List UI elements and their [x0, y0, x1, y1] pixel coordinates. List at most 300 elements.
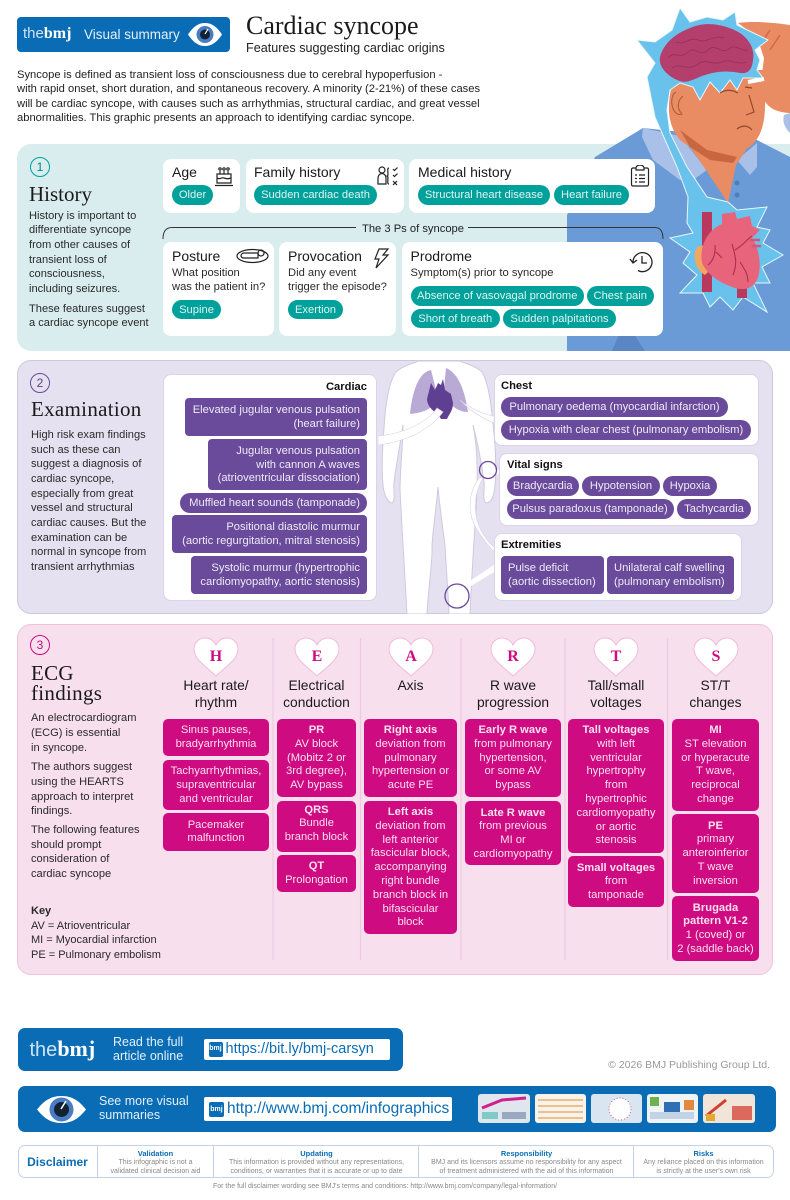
finding: late R wave [465, 801, 561, 865]
prodrome title: Prodrome [410, 248, 472, 264]
finding: tall voltages: or aortic [596, 821, 636, 833]
finding: tall voltages: from [605, 779, 627, 791]
finding: pacemaker malfunction: malfunction [187, 832, 245, 844]
finding: pulse deficit: Pulse deficit [508, 562, 568, 574]
heart letter S: S [711, 648, 720, 665]
finding: late R wave: from previous [479, 820, 547, 832]
finding: PE: T wave [698, 861, 733, 873]
tag: sudden cardiac death [254, 185, 377, 204]
prompt note: consideration of [31, 853, 109, 865]
posture question: was the patient in? [172, 281, 265, 293]
validation text [98, 1159, 214, 1177]
tag: supine [172, 300, 221, 319]
tag: short of breath: Short of breath [418, 312, 492, 324]
column title [283, 678, 350, 710]
column title: voltages [590, 695, 642, 710]
finding: tachyarrhythmias: supraventricular [176, 779, 256, 791]
finding: cannon A waves: (atrioventricular dissociation) [218, 472, 360, 484]
extremities heading: Extremities [501, 538, 561, 550]
icon: eye [188, 23, 222, 46]
finding: left axis: block [397, 916, 424, 928]
finding: MI: ST elevation [684, 738, 746, 750]
finding: tall voltages: Tall voltages [583, 724, 649, 736]
finding: early R wave: hypertension, [479, 752, 547, 764]
finding: tall voltages: ventricular [590, 752, 642, 764]
provocation question [288, 267, 387, 293]
banner label: Visual summary [84, 27, 180, 42]
authors note: The authors suggest [31, 761, 132, 773]
finding: Brugada pattern: 2 (saddle back) [677, 943, 754, 955]
finding: PE: inversion [693, 875, 738, 887]
disclaimer panel [18, 1145, 774, 1178]
tag: chest pain: Chest pain [594, 290, 647, 302]
card: posture [163, 242, 274, 336]
tag: sudden palpitations: Sudden palpitations [510, 312, 609, 324]
finding: sinus pauses [163, 718, 269, 756]
finding: early R wave [465, 718, 561, 797]
footer terms line: For the full disclaimer wording see BMJ's terms and conditions: http://www.bmj.com/company/legal-information/ [213, 1183, 557, 1190]
intro text: with rapid onset, short duration, and spontaneous recovery. A minority (2-21%) of these cases [17, 83, 480, 95]
key [31, 905, 161, 960]
finding: pulmonary oedema [501, 397, 728, 416]
tag: short of breath [410, 308, 500, 328]
header banner [17, 17, 230, 52]
link box [204, 1097, 452, 1121]
heart letter R [490, 638, 536, 676]
responsibility text [420, 1159, 634, 1177]
family history title: Family history [254, 164, 340, 180]
finding: PR: (Mobitz 2 or [287, 752, 346, 764]
examination description: suggest a diagnosis of [31, 458, 141, 470]
finding: tall voltages: hypertrophic [585, 793, 647, 805]
finding: tall voltages [568, 718, 664, 853]
finding: hypoxia with clear chest [501, 420, 751, 440]
key: AV = Atrioventricular [31, 920, 130, 932]
finding: pulmonary oedema: Pulmonary oedema (myocardial infarction) [509, 401, 720, 413]
finding: tachyarrhythmias: Tachyarrhythmias, [171, 765, 261, 777]
finding: elevated JVP: (heart failure) [293, 418, 360, 430]
ECG description [31, 712, 136, 754]
finding: unilateral calf swelling: Unilateral calf swelling [614, 562, 725, 574]
column title: Axis [397, 678, 424, 693]
finding: QRS: Bundle [299, 817, 334, 829]
heart letter S [694, 638, 738, 676]
finding: small voltages [568, 856, 664, 907]
finding: late R wave: cardiomyopathy [474, 848, 552, 860]
tag: sudden palpitations [503, 308, 616, 328]
tag: heart failure [554, 185, 629, 204]
heading: history: History [29, 182, 92, 206]
prompt note: The following features [31, 824, 140, 836]
key: MI = Myocardial infarction [31, 934, 157, 946]
heading: ECG findings: ECG [31, 661, 74, 685]
finding: MI: T wave, [696, 765, 735, 777]
column S: ST/T changes [672, 638, 759, 961]
icon: bmj: bmj [210, 1106, 223, 1112]
finding: elevated JVP [185, 398, 367, 436]
finding: right axis [364, 718, 457, 797]
subtitle: Features suggesting cardiac origins [246, 41, 445, 55]
tag: older [172, 185, 213, 204]
finding: sinus pauses: Sinus pauses, [181, 724, 251, 736]
finding: diastolic murmur [172, 515, 367, 553]
finding: left axis: left anterior [383, 834, 438, 846]
finding: tall voltages: cardiomyopathy [576, 807, 655, 819]
finding: MI: change [697, 793, 734, 805]
finding: right axis: pulmonary [384, 752, 437, 764]
column A: axis [364, 638, 457, 934]
finding: cannon A waves [208, 439, 367, 490]
article URL: https://bit.ly/bmj-carsyn [226, 1040, 374, 1056]
column title [183, 678, 249, 710]
finding: left axis: fascicular block, [371, 847, 450, 859]
tag: structural heart disease [418, 185, 550, 204]
examination description: vessel and structural [31, 502, 133, 514]
card: provocation [279, 242, 396, 336]
finding: MI: reciprocal [691, 779, 740, 791]
panel: history [17, 144, 790, 351]
finding: left axis: bifascicular [383, 903, 438, 915]
card: cardiac findings [163, 374, 377, 600]
updating heading: Updating [300, 1149, 333, 1158]
validation text: validated clinical decision aid [111, 1168, 200, 1175]
heading: ECG findings [31, 661, 102, 704]
finding: PR: PR [309, 724, 324, 736]
finding: left axis: deviation from [375, 820, 446, 832]
heading: examination: Examination [31, 397, 142, 421]
responsibility text: BMJ and its licensors assume no responsibility for any aspect [431, 1159, 622, 1166]
section number 3 [30, 635, 50, 655]
examination description: normal in syncope from [31, 546, 146, 558]
chest heading: Chest [501, 380, 532, 392]
card: chest findings [494, 374, 758, 446]
banner: more visual summaries [18, 1086, 776, 1132]
prompt note: cardiac syncope [31, 868, 111, 880]
finding: pulsus paradoxus [506, 499, 674, 518]
heart letter E [294, 638, 340, 676]
finding: pacemaker malfunction [163, 813, 269, 851]
authors note: approach to interpret [31, 791, 133, 803]
infographics URL: http://www.bmj.com/infographics [227, 1100, 449, 1117]
history note: a cardiac syncope event [29, 317, 149, 329]
finding: hypotension: Hypotension [590, 480, 652, 492]
icon: bmj [208, 1042, 222, 1056]
finding: PE: anteroinferior [683, 847, 748, 859]
history note [29, 302, 149, 329]
heart letter H [194, 638, 238, 676]
finding: elevated JVP: Elevated jugular venous pulsation [193, 404, 360, 416]
finding: early R wave: bypass [495, 779, 531, 791]
history description: including seizures. [29, 283, 120, 295]
prodrome description: Symptom(s) prior to syncope [410, 267, 554, 279]
intro text: abnormalities. This graphic presents an approach to identifying cardiac syncope. [17, 112, 415, 124]
finding: right axis: deviation from [375, 738, 446, 750]
thumbnails of other infographics [478, 1094, 756, 1124]
disclaimer: responsibility [420, 1148, 634, 1176]
authors note: findings. [31, 805, 72, 817]
finding: hypoxia with clear chest: Hypoxia with clear chest (pulmonary embolism) [509, 424, 743, 436]
illustration: man with brain and heart [567, 7, 790, 351]
column H: heart rate and rhythm [163, 638, 269, 851]
finding: QT [277, 854, 356, 892]
posture question: What position [172, 267, 240, 279]
finding: MI: or hyperacute [681, 752, 750, 764]
heart letter T [594, 638, 638, 676]
history description: differentiate syncope [29, 224, 131, 236]
provocation question: Did any event [288, 267, 356, 279]
finding: systolic murmur [191, 556, 367, 594]
banner: read the full article [18, 1028, 403, 1071]
validation text: This infographic is not a [119, 1159, 192, 1166]
column title: conduction [283, 695, 350, 710]
icon: patient lying on bed [236, 248, 269, 264]
finding: systolic murmur: Systolic murmur (hypertrophic [211, 562, 360, 574]
finding: hypotension [582, 476, 660, 496]
card: family history [246, 158, 404, 213]
finding: diastolic murmur: Positional diastolic murmur [226, 521, 360, 533]
finding: systolic murmur: cardiomyopathy, aortic stenosis) [200, 576, 360, 588]
diagram: body with callouts [378, 361, 499, 614]
ECG description: in syncope. [31, 742, 87, 754]
authors note: using the HEARTS [31, 776, 124, 788]
finding: late R wave: Late R wave [481, 806, 545, 818]
finding: tall voltages: stenosis [595, 834, 637, 846]
finding: pulse deficit: (aortic dissection) [508, 576, 596, 588]
bracket: the 3 Ps of syncope [162, 223, 664, 239]
posture title: Posture [172, 248, 220, 264]
icon: cake [215, 167, 233, 186]
icon: bmj [209, 1102, 224, 1116]
intro text: Syncope is defined as transient loss of consciousness due to cerebral hypoperfusion - [17, 68, 442, 80]
disclaimer: updating [214, 1148, 418, 1176]
finding: unilateral calf swelling: (pulmonary embolism) [614, 576, 725, 588]
finding: sinus pauses: bradyarrhythmia [176, 738, 256, 750]
finding: early R wave: Early R wave [478, 724, 548, 736]
prompt note [31, 824, 140, 880]
responsibility text: of treatment administered with the aid of this information [440, 1168, 613, 1175]
card: vital signs [499, 453, 758, 526]
finding: tachyarrhythmias: and ventricular [179, 793, 253, 805]
age title: Age [172, 164, 197, 180]
link box [204, 1038, 390, 1060]
examination description: High risk exam findings [31, 429, 146, 441]
risks text: Any reliance placed on this information [643, 1159, 764, 1166]
finding: small voltages: tamponade [588, 889, 644, 901]
disclaimer: risks [634, 1148, 772, 1176]
history description: consciousness, [29, 268, 105, 280]
ECG description: An electrocardiogram [31, 712, 136, 724]
intro text [17, 68, 480, 124]
finding: PE: primary [697, 833, 734, 845]
risks text [634, 1159, 772, 1177]
history description [29, 210, 136, 295]
history description: History is important to [29, 210, 136, 222]
finding: left axis: right bundle [381, 875, 440, 887]
column title: rhythm [195, 695, 237, 710]
finding: diastolic murmur: (aortic regurgitation, mitral stenosis) [182, 535, 360, 547]
column title: Tall/small [588, 678, 644, 693]
risks heading: Risks [693, 1149, 714, 1158]
finding: left axis: Left axis [388, 806, 433, 818]
icon: clipboard [630, 165, 650, 187]
read article text: Read the full [113, 1035, 183, 1049]
tag: exertion: Exertion [295, 304, 336, 316]
finding: PR: AV bypass [290, 779, 343, 791]
finding: tachycardia [677, 499, 751, 518]
column title [689, 678, 742, 710]
section number 1: 1 [37, 160, 43, 174]
column title: Electrical [288, 678, 344, 693]
icon: eye [36, 1094, 86, 1124]
tag: chest pain [587, 286, 654, 306]
examination description: transient arrhythmias [31, 561, 135, 573]
cardiac heading: Cardiac [326, 381, 367, 393]
icon: bmj: bmj [209, 1045, 222, 1052]
examination description: such as these can [31, 444, 120, 456]
logo: the bmj: thebmj [23, 25, 71, 42]
section number 2: 2 [37, 376, 43, 390]
finding: left axis: accompanying [374, 861, 447, 873]
finding: tachyarrhythmias [163, 760, 269, 810]
finding: bradycardia [506, 476, 579, 496]
key: PE = Pulmonary embolism [31, 948, 161, 960]
tag: absence of vasovagal prodrome: Absence of vasovagal prodrome [417, 290, 577, 302]
finding: early R wave: from pulmonary [474, 738, 552, 750]
column title: R wave [490, 678, 536, 693]
medical history title: Medical history [418, 164, 511, 180]
updating text [214, 1159, 418, 1177]
ECG description: (ECG) is essential [31, 727, 120, 739]
column R: R wave progression [465, 638, 561, 865]
finding: QRS [277, 800, 356, 852]
column T: tall and small voltages [568, 638, 664, 907]
see more text: summaries [99, 1108, 160, 1122]
see more text [99, 1094, 199, 1124]
heart letter T: T [611, 648, 622, 665]
finding: hypoxia [663, 476, 717, 496]
column title: ST/T [701, 678, 730, 693]
finding: MI: MI [709, 724, 722, 736]
icon: family [377, 166, 398, 186]
examination description: cardiac syncope, [31, 473, 114, 485]
panel: ECG findings [17, 624, 773, 975]
column title: progression [477, 695, 549, 710]
key: Key [31, 905, 51, 917]
examination description: cardiac causes. But the [31, 517, 146, 529]
finding: muffled heart sounds [180, 493, 367, 512]
finding: right axis: Right axis [384, 724, 437, 736]
card: extremities [494, 533, 742, 601]
card: medical history [409, 158, 655, 213]
finding: Brugada pattern [672, 896, 759, 961]
finding: Brugada pattern: pattern V1-2 [683, 915, 748, 927]
finding: PE [672, 814, 759, 893]
heart letter E: E [311, 648, 322, 665]
history note: These features suggest [29, 302, 145, 314]
updating text: This information is provided without any representations, [229, 1159, 404, 1166]
section number 2 [30, 373, 50, 393]
tag: structural heart disease: Structural heart disease [425, 189, 543, 201]
card: prodrome [402, 242, 663, 336]
heart letter A: A [405, 648, 417, 665]
disclaimer label: Disclaimer [27, 1155, 88, 1169]
finding: hypoxia: Hypoxia [670, 480, 710, 492]
finding: right axis: hypertension or [372, 765, 449, 777]
finding: PE: PE [708, 820, 723, 832]
updating text: conditions, or warranties that it is accurate or up to date [230, 1168, 402, 1175]
prompt note: should prompt [31, 839, 101, 851]
examination description: examination can be [31, 532, 127, 544]
examination description [31, 429, 146, 573]
risks text: is strictly at the user's own risk [656, 1168, 751, 1175]
icon: clock history [630, 252, 653, 272]
finding: right axis: acute PE [388, 779, 433, 791]
read article text [113, 1036, 198, 1064]
examination description: especially from great [31, 488, 133, 500]
column title: changes [689, 695, 742, 710]
tag: heart failure: Heart failure [561, 189, 622, 201]
finding: unilateral calf swelling [607, 556, 734, 594]
finding: QRS: branch block [285, 831, 348, 843]
title: Cardiac syncope [246, 11, 419, 40]
section number 3: 3 [37, 638, 43, 652]
icon: lightning bolt [374, 248, 390, 268]
column title [477, 678, 549, 710]
tag: exertion [288, 300, 343, 319]
finding: QT: QT [309, 860, 324, 872]
finding: pacemaker malfunction: Pacemaker [188, 818, 244, 830]
see more text: See more visual [99, 1094, 189, 1108]
card: age [163, 158, 240, 213]
column title: Heart rate/ [183, 678, 249, 693]
finding: Brugada pattern: 1 (coved) or [686, 929, 745, 941]
finding: pulsus paradoxus: Pulsus paradoxus (tamponade) [512, 503, 668, 515]
finding: Brugada pattern: Brugada [693, 902, 738, 914]
finding: left axis: branch block in [373, 889, 448, 901]
provocation question: trigger the episode? [288, 281, 387, 293]
finding: QT: Prolongation [285, 874, 348, 886]
section number 1 [30, 157, 50, 177]
history description: transient loss of [29, 254, 107, 266]
finding: pulse deficit [501, 556, 604, 594]
tag: absence of vasovagal prodrome [410, 286, 584, 306]
read article text: article online [113, 1048, 183, 1062]
provocation title: Provocation [288, 248, 362, 264]
finding: tall voltages: hypertrophy [586, 765, 646, 777]
tag: supine: Supine [179, 304, 214, 316]
finding: PR [277, 718, 356, 797]
finding: PR: 3rd degree), [286, 765, 347, 777]
posture question [172, 267, 265, 293]
vital signs heading: Vital signs [507, 459, 563, 471]
finding: MI [672, 718, 759, 811]
finding: cannon A waves: with cannon A waves [256, 459, 360, 471]
disclaimer: validation [98, 1148, 214, 1176]
intro text: will be cardiac syncope, with causes such as arrhythmias, structural cardiac, and great vessel [17, 98, 480, 110]
finding: small voltages: Small voltages [577, 862, 655, 874]
bracket: the 3 Ps of syncope: The 3 Ps of syncope [362, 223, 464, 235]
column E: electrical conduction [277, 638, 356, 892]
heart letter R: R [507, 648, 519, 665]
panel: examination [17, 360, 773, 614]
tag: sudden cardiac death: Sudden cardiac death [261, 189, 370, 201]
finding: tachycardia: Tachycardia [684, 503, 744, 515]
copyright: © 2026 BMJ Publishing Group Ltd. [608, 1059, 770, 1071]
tag: older: Older [179, 189, 206, 201]
validation heading: Validation [138, 1149, 173, 1158]
finding: cannon A waves: Jugular venous pulsation [236, 445, 360, 457]
finding: early R wave: or some AV [484, 765, 542, 777]
